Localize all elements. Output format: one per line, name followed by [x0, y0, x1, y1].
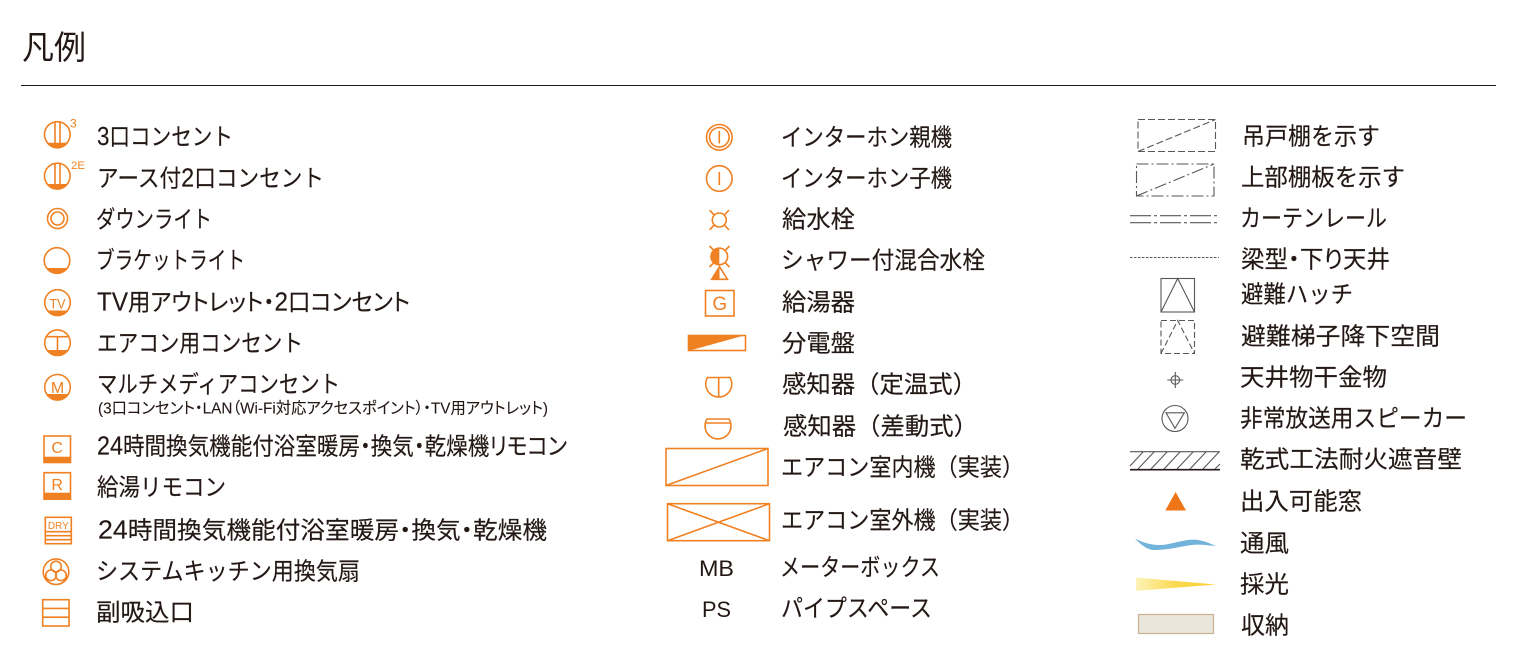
label: 乾式工法耐火遮音壁 [1240, 446, 1462, 474]
label: 給湯リモコン [97, 474, 226, 502]
icon: accessible window triangle [1165, 492, 1186, 510]
label: 24時間換気機能付浴室暖房・換気・乾燥機 [98, 514, 547, 544]
icon: sub intake [43, 600, 69, 626]
icon: curtain rail [1130, 216, 1219, 223]
item: 梁型・下り天井 [1130, 246, 1390, 274]
icon: R remote: R [51, 477, 63, 494]
icon: bracket light [44, 248, 70, 274]
item: 給湯リモコン [44, 473, 226, 502]
label: シャワー付混合水栓 [781, 248, 985, 274]
item: アース付2口コンセント [44, 160, 324, 192]
panel: middle column [666, 124, 1024, 622]
icon: water heater: G [712, 294, 727, 315]
item: 天井物干金物 [1167, 364, 1387, 392]
label: 収納 [1241, 612, 1289, 640]
icon: beam line [1130, 256, 1219, 258]
item: 3口コンセント [44, 116, 233, 151]
icon: C remote: C [51, 440, 63, 457]
symbol: MB: MB [699, 556, 734, 581]
item: ダウンライト [48, 206, 212, 234]
label: インターホン親機 [781, 124, 952, 152]
item: エアコン用コンセント [45, 330, 303, 358]
item: 24時間換気機能付浴室暖房・換気・乾燥機 [45, 514, 547, 544]
icon: ceiling drying hook [1167, 372, 1183, 388]
item: 非常放送用スピーカー [1162, 406, 1467, 432]
label: 出入可能窓 [1240, 488, 1362, 516]
icon: air conditioner outlet [45, 330, 70, 356]
label: インターホン子機 [781, 166, 952, 192]
label: 分電盤 [782, 330, 855, 358]
label: 天井物干金物 [1240, 364, 1387, 392]
label: 給湯器 [782, 290, 855, 316]
icon: kitchen fan [43, 559, 69, 584]
icon: ventilation wave [1135, 538, 1216, 550]
icon: storage swatch [1138, 614, 1214, 634]
label: メーターボックス [780, 554, 940, 582]
icon: grounded outlet: 2E [71, 160, 85, 172]
icon: upper shelf [1136, 164, 1214, 196]
icon: differential sensor [705, 419, 731, 439]
label: カーテンレール [1240, 206, 1387, 232]
item: 収納 [1138, 612, 1289, 640]
icon: fixed temperature sensor [706, 378, 732, 398]
label: 吊戸棚を示す [1242, 124, 1380, 150]
icon: C remote [44, 436, 70, 463]
icon: TV outlet: TV [50, 296, 66, 312]
icon: escape ladder space [1161, 320, 1194, 354]
label: 梁型・下り天井 [1241, 246, 1390, 274]
item: 出入可能窓 [1165, 488, 1362, 516]
icon: 3-gang outlet [44, 116, 77, 149]
icon: multimedia outlet: M [51, 380, 64, 397]
icon: emergency speaker [1162, 406, 1188, 432]
item: 副吸込口 [43, 600, 194, 626]
label: 3口コンセント [97, 121, 233, 151]
label: システムキッチン用換気扇 [96, 558, 360, 586]
label: 給水栓 [782, 206, 855, 234]
item: TV用アウトレット・2口コンセント [45, 286, 410, 316]
label: 避難ハッチ [1241, 282, 1353, 308]
item: ブラケットライト [44, 248, 245, 274]
item: 感知器(定温式) [706, 372, 977, 398]
label: 上部棚板を示す [1241, 164, 1405, 192]
icon: shower mixer tap [710, 246, 730, 280]
icon: outdoor unit [668, 504, 770, 541]
label: 非常放送用スピーカー [1240, 406, 1467, 432]
symbol: PS: PS [702, 597, 731, 622]
item: シャワー付混合水栓 [710, 246, 985, 280]
icon: intercom slave [706, 166, 732, 191]
panel: left column [43, 116, 567, 626]
icon: hanging cabinet [1138, 120, 1216, 152]
icon: grounded outlet [44, 160, 85, 190]
item: 上部棚板を示す [1136, 164, 1405, 196]
item: メーターボックス [699, 554, 940, 582]
item: 避難ハッチ [1161, 278, 1353, 312]
label: ダウンライト [96, 206, 212, 234]
icon: intercom master [706, 124, 732, 150]
label: エアコン用コンセント [97, 330, 303, 358]
icon: fireproof wall [1130, 452, 1220, 470]
icon: 3-gang outlet: 3 [70, 116, 77, 130]
sub label: (3口コンセント・LAN（Wi-Fi対応アクセスポイント）・TV用アウトレット) [98, 400, 548, 418]
item: カーテンレール [1130, 206, 1387, 232]
item: 給湯器 [706, 290, 855, 316]
label: 避難梯子降下空間 [1241, 324, 1440, 350]
icon: indoor unit [666, 448, 768, 486]
icon: escape hatch [1161, 278, 1194, 312]
item: エアコン室内機(実装) [666, 448, 1024, 486]
label: パイプスペース [781, 596, 932, 622]
title: 凡例 [22, 29, 86, 66]
icon: TV outlet [45, 290, 70, 316]
item: 避難梯子降下空間 [1161, 320, 1440, 354]
label: TV用アウトレット・2口コンセント [97, 286, 410, 316]
item: 給水栓 [710, 206, 855, 234]
label: 感知器（差動式） [783, 414, 978, 440]
item: インターホン子機 [706, 166, 952, 192]
item: 24時間換気機能付浴室暖房・換気・乾燥機リモコン [44, 430, 567, 463]
icon: daylight beam [1136, 578, 1216, 591]
label: エアコン室内機（実装） [781, 454, 1024, 482]
label: 感知器（定温式） [782, 372, 977, 398]
panel: right column [1130, 120, 1467, 640]
item: 採光 [1136, 572, 1289, 598]
label: ブラケットライト [96, 248, 245, 274]
item: システムキッチン用換気扇 [43, 558, 360, 586]
label: 採光 [1240, 572, 1289, 598]
item: 乾式工法耐火遮音壁 [1130, 446, 1462, 474]
icon: R remote [44, 473, 70, 499]
item: 感知器(差動式) [705, 414, 978, 440]
item: 分電盤 [688, 330, 855, 358]
icon: multimedia outlet [45, 374, 70, 400]
label: マルチメディアコンセント [97, 372, 340, 398]
item: インターホン親機 [706, 124, 952, 152]
label: エアコン室外機（実装） [781, 508, 1024, 534]
label: 24時間換気機能付浴室暖房・換気・乾燥機リモコン [97, 430, 567, 460]
item: エアコン室外機(実装) [668, 504, 1024, 541]
icon: water tap [710, 210, 729, 230]
icon: distribution board [688, 335, 746, 351]
label: 副吸込口 [96, 600, 194, 626]
icon: DRY unit [45, 517, 71, 544]
item: 吊戸棚を示す [1138, 120, 1380, 152]
icon: downlight [48, 208, 68, 228]
label: アース付2口コンセント [97, 162, 324, 192]
item: 通風 [1135, 530, 1289, 558]
label: 通風 [1240, 530, 1289, 558]
item: マルチメディアコンセント [45, 372, 548, 418]
icon: water heater [706, 290, 734, 316]
item: パイプスペース [702, 596, 932, 622]
icon: DRY unit: DRY [48, 521, 69, 532]
